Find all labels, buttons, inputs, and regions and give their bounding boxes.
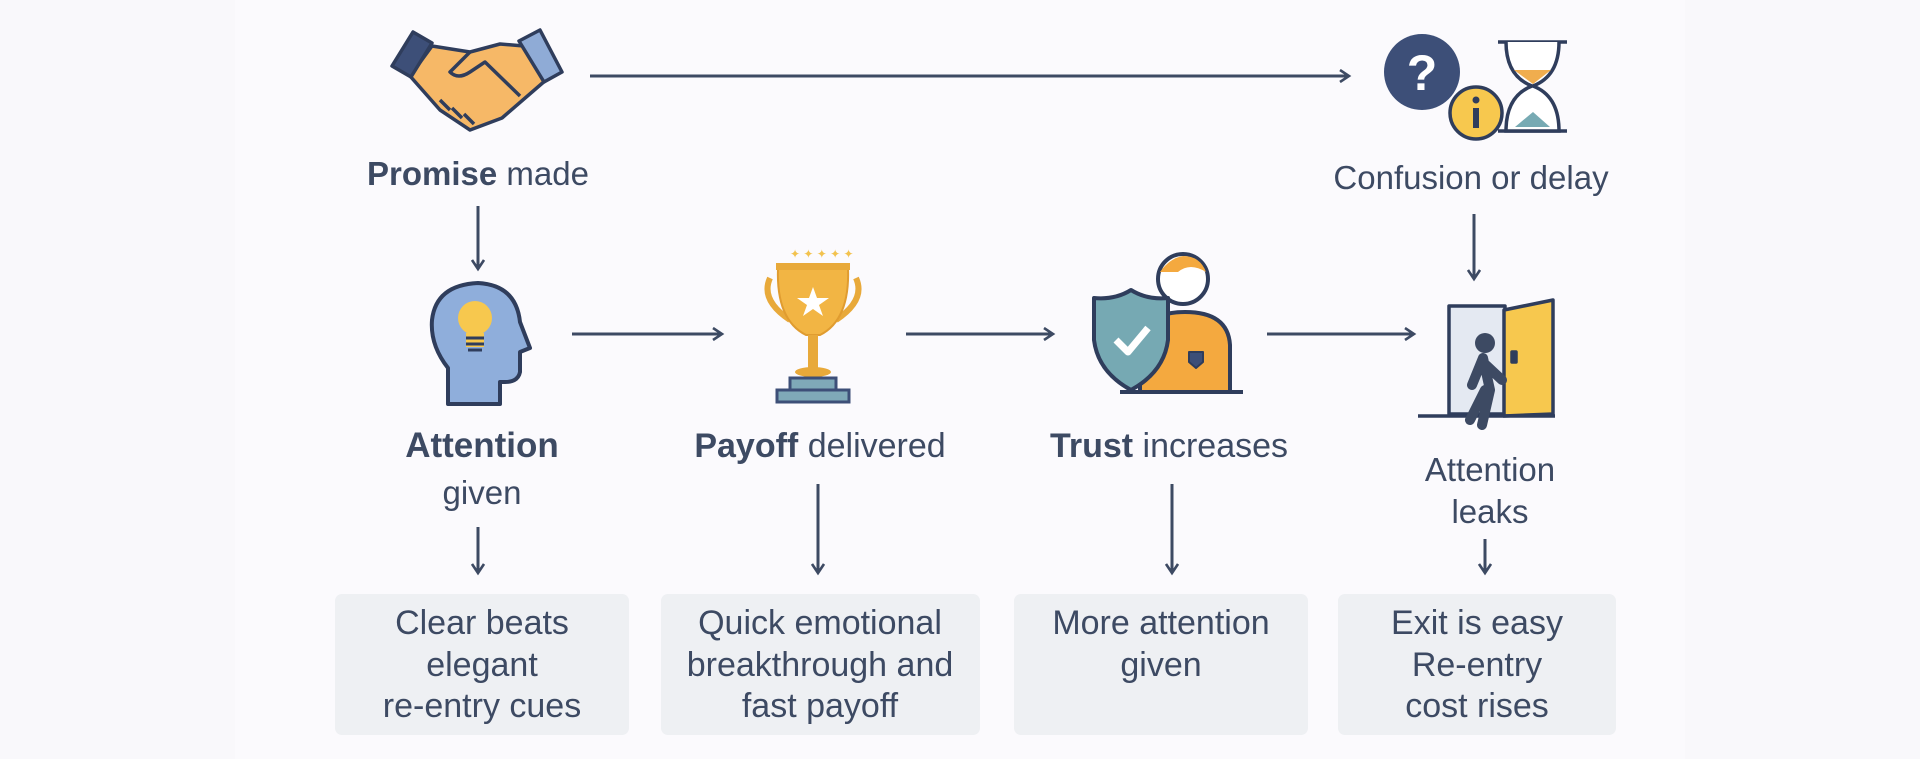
icon: trophy: [768, 247, 858, 402]
icon: confusion: [1384, 34, 1567, 139]
box: exit is easy: Re-entry: [1412, 646, 1542, 684]
arrow: confusion down: [1472, 214, 1476, 279]
box: exit is easy: cost rises: [1405, 687, 1549, 725]
box: more attention given: given: [1120, 646, 1202, 684]
icon: handshake: [392, 30, 562, 130]
label: attention given: [405, 426, 559, 511]
label: attention given: given: [443, 474, 521, 511]
label: attention leaks: leaks: [1451, 493, 1529, 530]
box: quick emotional breakthrough: [661, 594, 980, 735]
arrow: attention to payoff: [572, 332, 722, 336]
box: quick emotional breakthrough: fast payoff: [742, 687, 899, 725]
label: trust increases: Trust increases: [1050, 427, 1288, 465]
box: clear beats elegant: re-entry cues: [383, 687, 581, 725]
icon: exit door: [1418, 300, 1555, 425]
box: quick emotional breakthrough: breakthrough and: [687, 646, 953, 684]
icon: confusion: ?: [1407, 45, 1437, 101]
label: attention leaks: Attention: [1425, 451, 1555, 488]
arrows: down to boxes: [478, 484, 1485, 573]
box: exit is easy: [1338, 594, 1616, 735]
label: payoff delivered: Payoff delivered: [694, 427, 946, 465]
box: clear beats elegant: Clear beats: [395, 604, 569, 642]
icon: shield with person: [1094, 254, 1243, 392]
box: more attention given: [1014, 594, 1308, 735]
box: clear beats elegant: elegant: [426, 646, 538, 684]
box: exit is easy: Exit is easy: [1391, 604, 1563, 642]
icon: head with lightbulb: [432, 283, 530, 404]
label: confusion or delay: Confusion or delay: [1333, 159, 1609, 196]
label: attention given: Attention: [405, 426, 559, 465]
arrow: promise to confusion: [590, 74, 1349, 78]
box: clear beats elegant: [335, 594, 629, 735]
box: quick emotional breakthrough: Quick emotional: [698, 604, 942, 642]
label: attention leaks: [1425, 451, 1555, 530]
arrow: trust to exit: [1267, 332, 1414, 336]
box: more attention given: More attention: [1052, 604, 1270, 642]
icon: trophy: ✦ ✦ ✦ ✦ ✦: [790, 247, 854, 261]
arrow: payoff to trust: [906, 332, 1053, 336]
arrow: promise down: [476, 206, 480, 269]
label: promise made: Promise made: [367, 155, 589, 192]
